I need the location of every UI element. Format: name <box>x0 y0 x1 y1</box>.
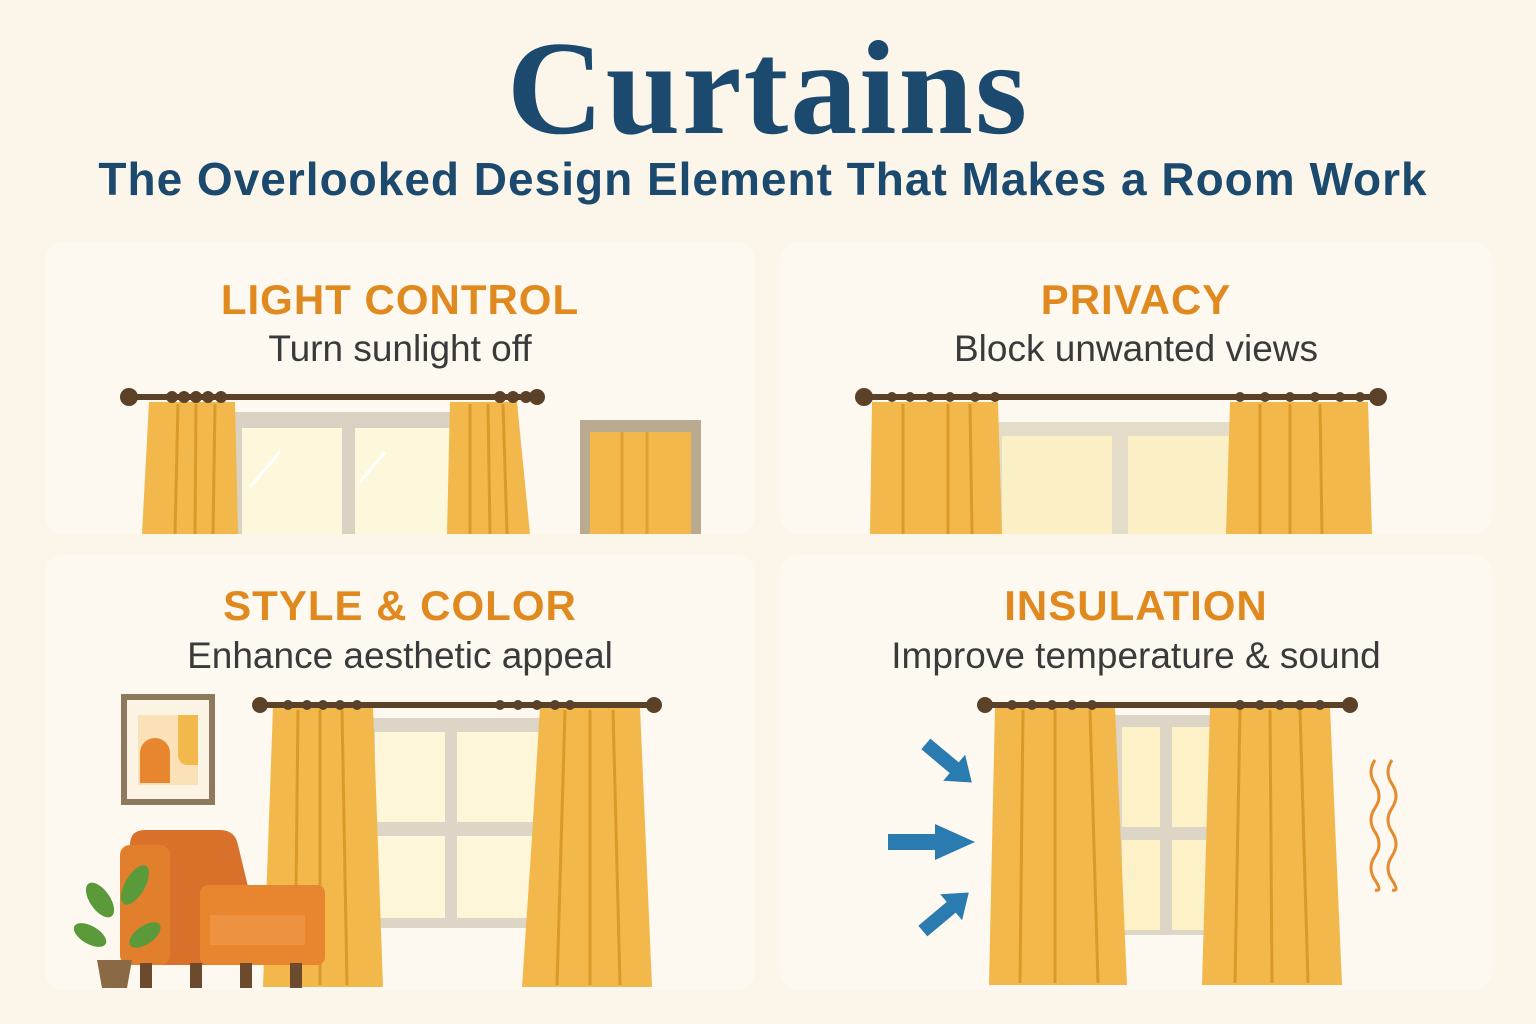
subtext: insulation: Improve temperature & sound <box>891 635 1381 676</box>
panel: style & color <box>45 555 755 990</box>
subtext: privacy: Block unwanted views <box>954 328 1318 369</box>
chair <box>130 830 250 965</box>
panel: light control <box>45 242 755 534</box>
plant <box>97 960 132 988</box>
illustration: light control <box>120 388 701 534</box>
heading: insulation: INSULATION <box>1004 582 1268 629</box>
title: Curtains <box>507 14 1029 162</box>
subtitle: The Overlooked Design Element That Makes a Room Work <box>98 153 1428 205</box>
illustration: privacy <box>855 388 1387 534</box>
panel: privacy <box>780 242 1492 534</box>
arrows <box>888 731 983 944</box>
heading: privacy: PRIVACY <box>1041 276 1231 323</box>
heading: light control: LIGHT CONTROL <box>221 276 579 323</box>
heading: style & color: STYLE & COLOR <box>223 582 577 629</box>
illustration: style & color <box>74 694 662 988</box>
illustration: insulation <box>888 697 1398 985</box>
subtext: light control: Turn sunlight off <box>268 328 532 369</box>
panel: insulation <box>780 555 1492 990</box>
subtext: style & color: Enhance aesthetic appeal <box>187 635 613 676</box>
